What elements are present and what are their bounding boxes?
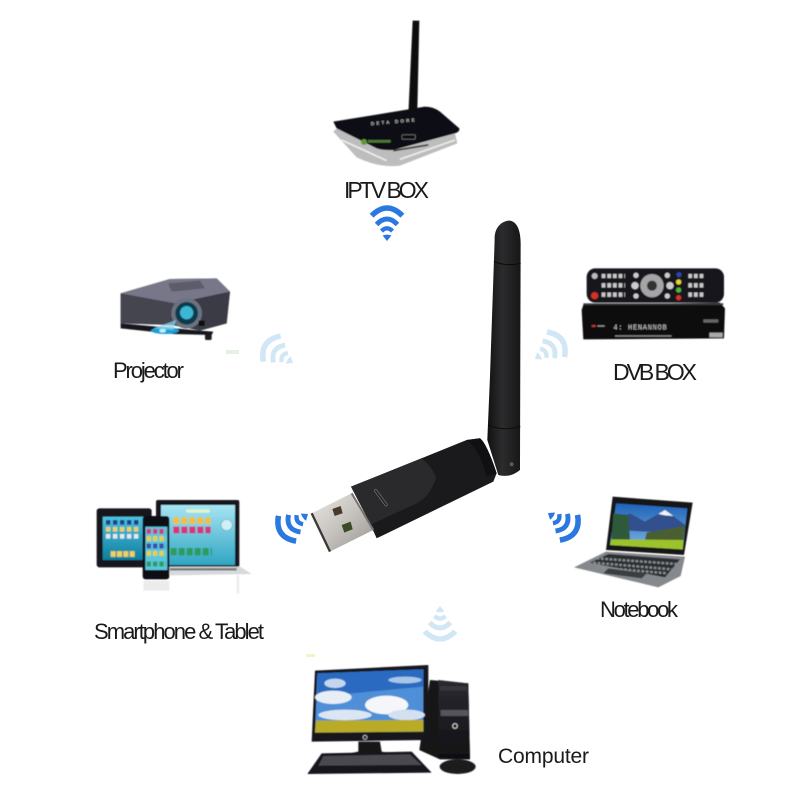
tower (419, 680, 470, 759)
antenna (487, 221, 521, 476)
label: IPTV BOX: IPTV BOX (344, 177, 429, 203)
label: Smartphone & Tablet: Smartphone & Tablet (94, 619, 264, 644)
icon: wifi DVB (526, 327, 571, 372)
smudge: pale mark near projector (226, 350, 239, 354)
laptop (156, 500, 252, 593)
device: smartphone, tablet and laptop (97, 500, 252, 593)
icon: wifi bottom (425, 606, 455, 639)
icon: wifi right (539, 500, 584, 545)
keyboard (307, 752, 432, 774)
adapter body (351, 438, 497, 538)
device: projector (121, 278, 230, 340)
device: DVB box and remote: 4: HENANNOB (613, 324, 667, 332)
monitor (312, 665, 428, 754)
icon: wifi top (372, 208, 402, 241)
device: DVB box and remote (582, 268, 725, 339)
device: IPTV box: DETA DORE (371, 118, 415, 126)
label: Projector: Projector (113, 358, 184, 383)
icon: wifi left (272, 501, 317, 546)
smudge: pale mark near computer (306, 654, 315, 657)
remote control (587, 268, 724, 303)
label: Notebook: Notebook (600, 597, 679, 622)
tablet (97, 508, 152, 567)
phone (143, 516, 169, 591)
USB plug (312, 493, 373, 552)
label: DVB BOX: DVB BOX (613, 359, 697, 385)
device: IPTV box (333, 21, 459, 166)
mouse (440, 759, 476, 774)
icon: wifi projector (257, 332, 302, 376)
USB wifi adapter (312, 221, 521, 552)
device: notebook (574, 497, 693, 587)
label: Computer: Computer (498, 745, 589, 768)
device: desktop computer (307, 665, 476, 774)
